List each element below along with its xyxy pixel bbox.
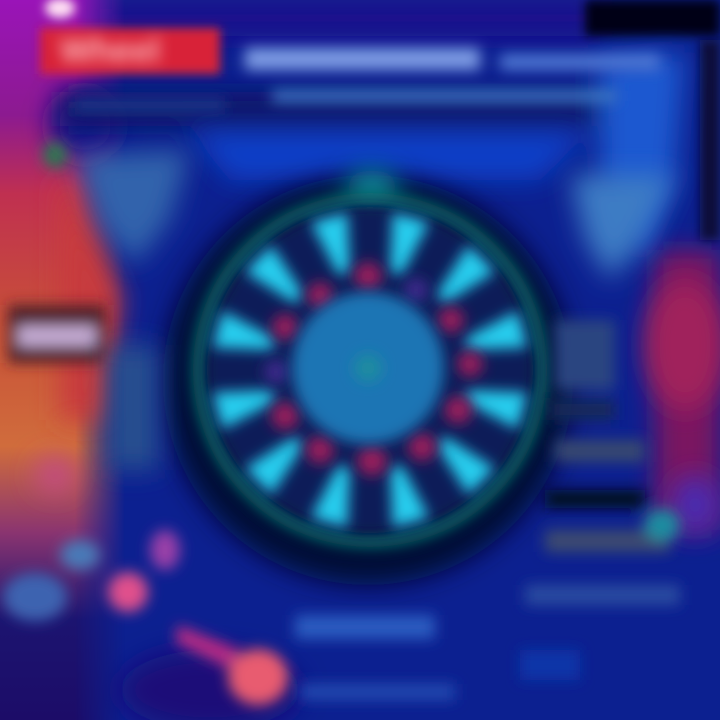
cyan wedges bbox=[212, 212, 528, 528]
wheel hub bbox=[292, 292, 444, 444]
bottom text bars bbox=[295, 615, 580, 700]
right list column bbox=[525, 320, 680, 605]
top teal marker bbox=[346, 170, 398, 206]
pink dot bbox=[35, 457, 75, 493]
green ring bbox=[199, 199, 541, 541]
green dot bbox=[43, 142, 67, 168]
red title badge bbox=[40, 28, 220, 74]
red spokes bbox=[264, 262, 483, 476]
bottom-left balls bbox=[3, 530, 180, 621]
hub centre bbox=[354, 354, 382, 382]
badge highlight bbox=[45, 0, 75, 18]
top band panel bbox=[60, 52, 685, 260]
right triangle panel bbox=[570, 175, 675, 280]
left triangle panel bbox=[75, 150, 190, 265]
title bars bbox=[75, 48, 660, 110]
left label box bbox=[8, 305, 106, 363]
wheel face bbox=[207, 207, 533, 533]
wheel bbox=[163, 170, 573, 585]
left vertical column bbox=[108, 345, 158, 470]
badge text: Wheel bbox=[60, 32, 160, 70]
pink arrow streak bbox=[175, 625, 288, 705]
outer dark ring bbox=[163, 175, 573, 585]
